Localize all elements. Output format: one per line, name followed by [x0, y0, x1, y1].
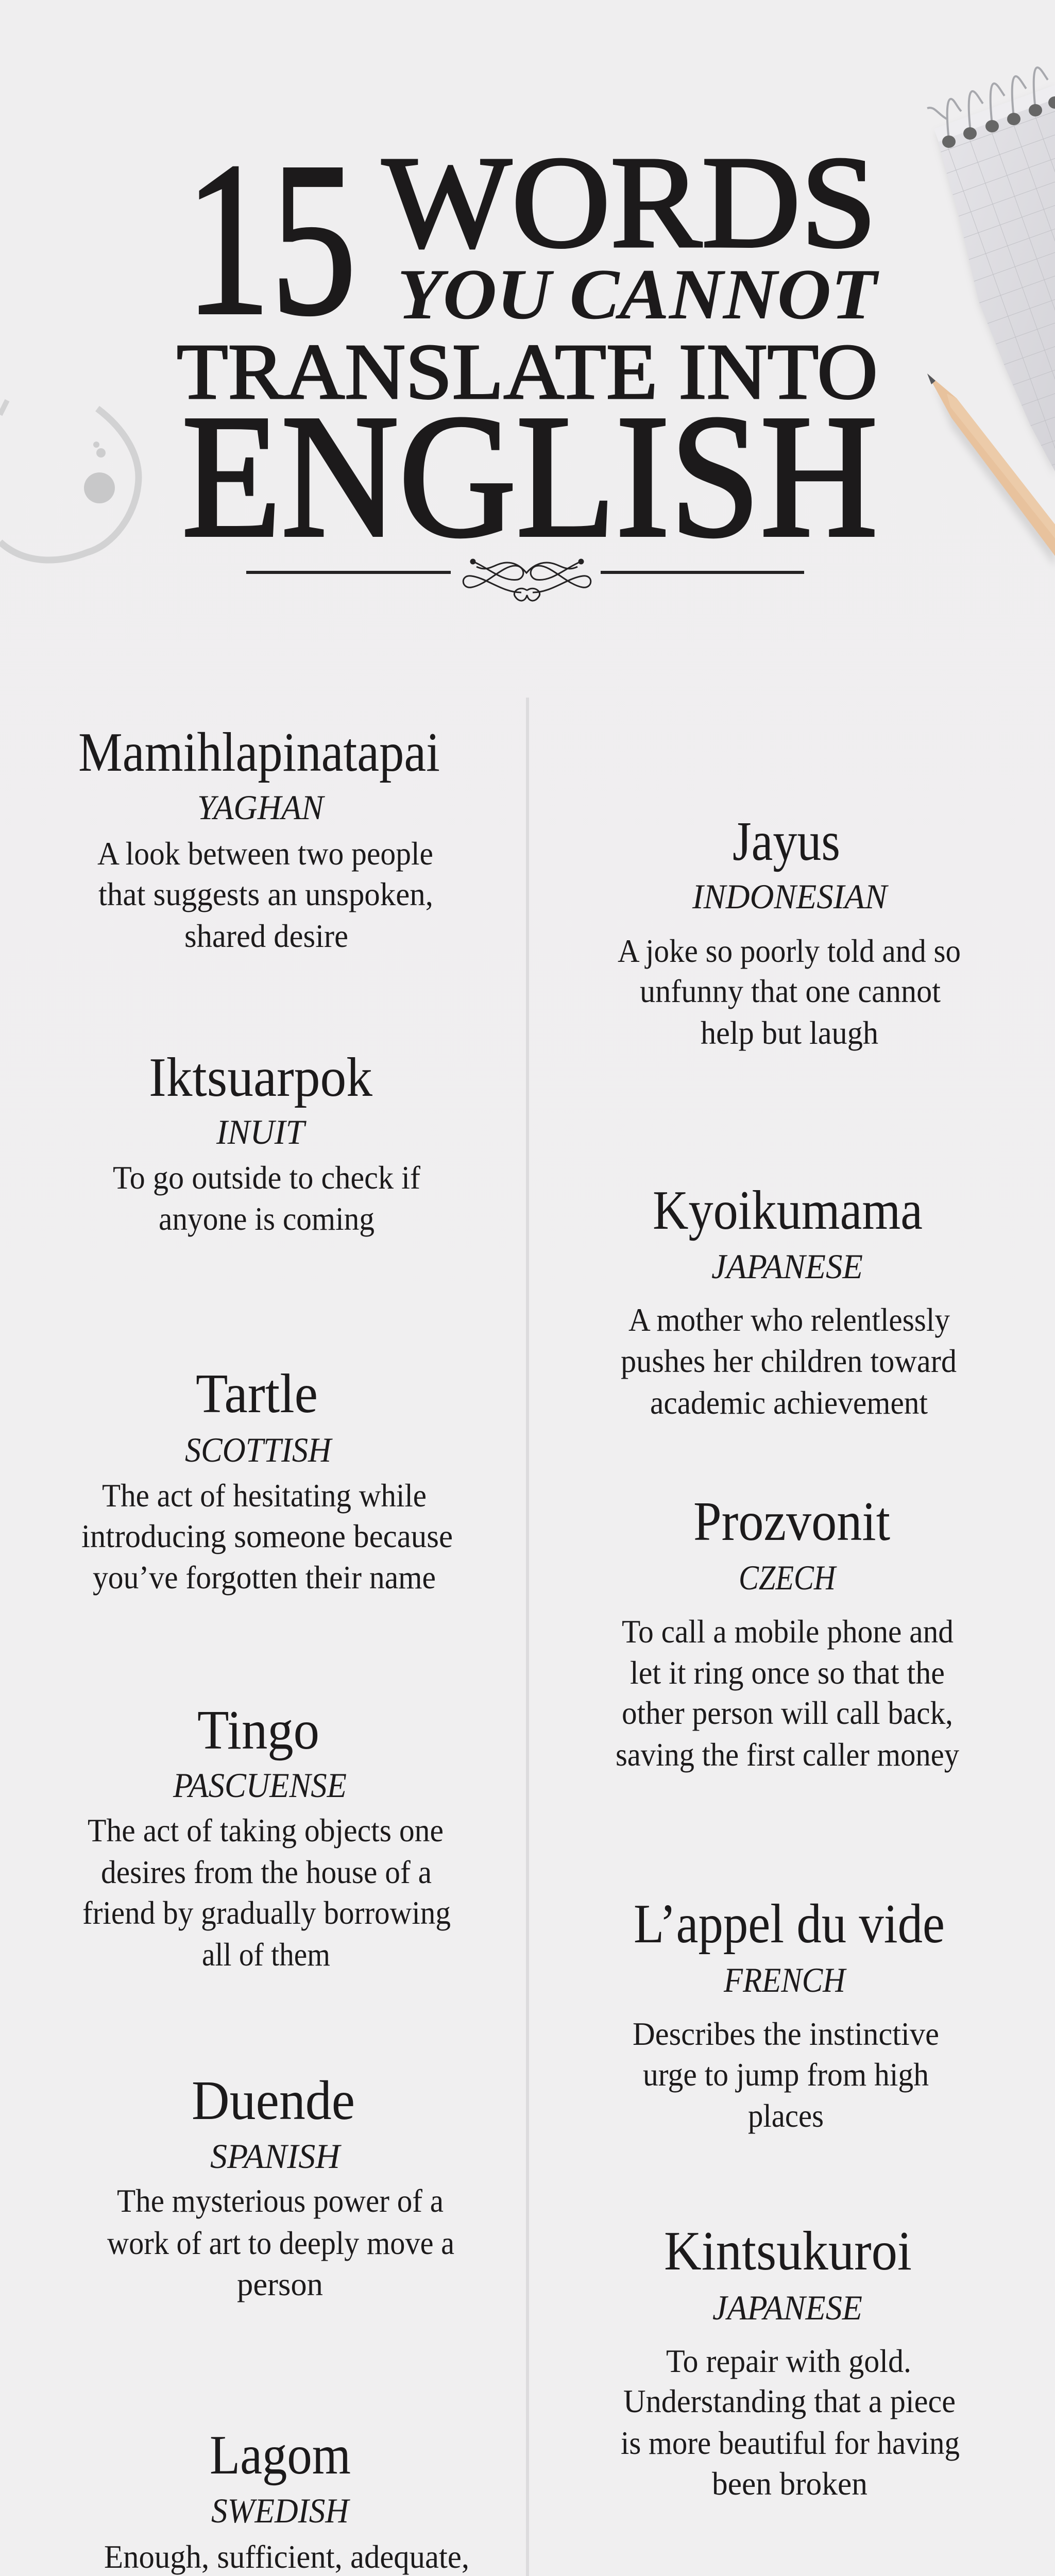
word: Tingo	[82, 1700, 451, 1973]
definition	[82, 1812, 451, 1973]
definition: person	[237, 2266, 323, 2302]
word: Kintsukuroi	[621, 2221, 960, 2502]
word name: L’appel du vide	[634, 1893, 945, 1955]
definition: friend by gradually borrowing	[82, 1895, 451, 1931]
definition	[633, 2016, 939, 2134]
pencil	[927, 374, 1055, 567]
center divider	[526, 698, 529, 2576]
language: INUIT	[216, 1112, 307, 1151]
definition	[618, 933, 961, 1051]
definition	[107, 2183, 454, 2302]
definition: you’ve forgotten their name	[93, 1560, 436, 1596]
title ornament rule	[246, 560, 804, 601]
coffee ring stain	[0, 400, 139, 560]
definition: anyone is coming	[159, 1201, 375, 1237]
word: Lagom	[104, 2425, 469, 2576]
word name: Prozvonit	[693, 1491, 890, 1552]
definition: saving the first caller money	[616, 1737, 959, 1773]
word: Mamihlapinatapai	[78, 722, 440, 954]
definition: work of art to deeply move a	[107, 2225, 454, 2261]
word name: Tingo	[197, 1700, 319, 1761]
definition: introducing someone because	[81, 1518, 453, 1554]
definition: Describes the instinctive	[633, 2016, 939, 2052]
word: L’appel du vide	[633, 1893, 945, 2134]
word: Duende	[107, 2070, 454, 2302]
title: 15	[185, 117, 356, 361]
definition: urge to jump from high	[643, 2057, 929, 2093]
definition: help but laugh	[701, 1015, 878, 1051]
title: YOU CANNOT	[397, 255, 880, 334]
title	[177, 117, 880, 573]
word name: Iktsuarpok	[149, 1047, 372, 1108]
definition	[616, 1614, 959, 1773]
word: Kyoikumama	[621, 1180, 957, 1421]
definition: that suggests an unspoken,	[98, 876, 433, 912]
definition	[621, 2343, 960, 2502]
definition: let it ring once so that the	[630, 1655, 945, 1691]
word name: Tartle	[196, 1363, 318, 1425]
language: FRENCH	[723, 1960, 847, 1999]
definition: Understanding that a piece	[623, 2383, 956, 2419]
definition: been broken	[712, 2466, 867, 2502]
language: CZECH	[739, 1558, 837, 1597]
definition: places	[748, 2098, 824, 2134]
definition: To call a mobile phone and	[622, 1614, 954, 1650]
definition: A joke so poorly told and so	[618, 933, 961, 969]
definition: pushes her children toward	[621, 1343, 957, 1379]
definition	[621, 1302, 957, 1421]
word: Jayus	[618, 811, 961, 1051]
language: SCOTTISH	[185, 1430, 333, 1469]
word name: Duende	[192, 2070, 355, 2131]
language: JAPANESE	[711, 1247, 863, 1286]
definition: Enough, sufficient, adequate,	[104, 2539, 469, 2575]
definition: A look between two people	[97, 836, 433, 872]
definition: The act of taking objects one	[88, 1812, 444, 1849]
definition: other person will call back,	[622, 1695, 953, 1731]
word name: Kyoikumama	[653, 1180, 923, 1241]
definition	[81, 1478, 453, 1596]
definition: shared desire	[184, 918, 348, 954]
definition: unfunny that one cannot	[640, 973, 941, 1009]
definition: A mother who relentlessly	[628, 1302, 950, 1338]
language: SWEDISH	[211, 2491, 351, 2530]
word name: Kintsukuroi	[664, 2221, 912, 2282]
definition: The act of hesitating while	[102, 1478, 427, 1514]
definition	[97, 836, 433, 954]
definition	[113, 1160, 420, 1237]
word name: Mamihlapinatapai	[78, 722, 440, 783]
language: JAPANESE	[712, 2288, 862, 2327]
title: TRANSLATE INTO	[177, 328, 878, 416]
definition: The mysterious power of a	[117, 2183, 444, 2219]
definition: To repair with gold.	[666, 2343, 911, 2379]
word name: Jayus	[733, 811, 840, 872]
word name: Lagom	[210, 2425, 351, 2486]
language: PASCUENSE	[173, 1766, 347, 1805]
definition: To go outside to check if	[113, 1160, 420, 1196]
language: YAGHAN	[197, 788, 325, 827]
word: Iktsuarpok	[113, 1047, 420, 1237]
definition: academic achievement	[650, 1385, 928, 1421]
language: INDONESIAN	[692, 877, 889, 916]
definition: is more beautiful for having	[621, 2425, 960, 2461]
title: WORDS	[382, 130, 877, 275]
title: ENGLISH	[182, 378, 878, 573]
word: Prozvonit	[616, 1491, 959, 1773]
definition: all of them	[202, 1937, 330, 1973]
definition: desires from the house of a	[101, 1854, 432, 1890]
word: Tartle	[81, 1363, 453, 1596]
notebook	[927, 67, 1055, 477]
language: SPANISH	[210, 2137, 342, 2176]
